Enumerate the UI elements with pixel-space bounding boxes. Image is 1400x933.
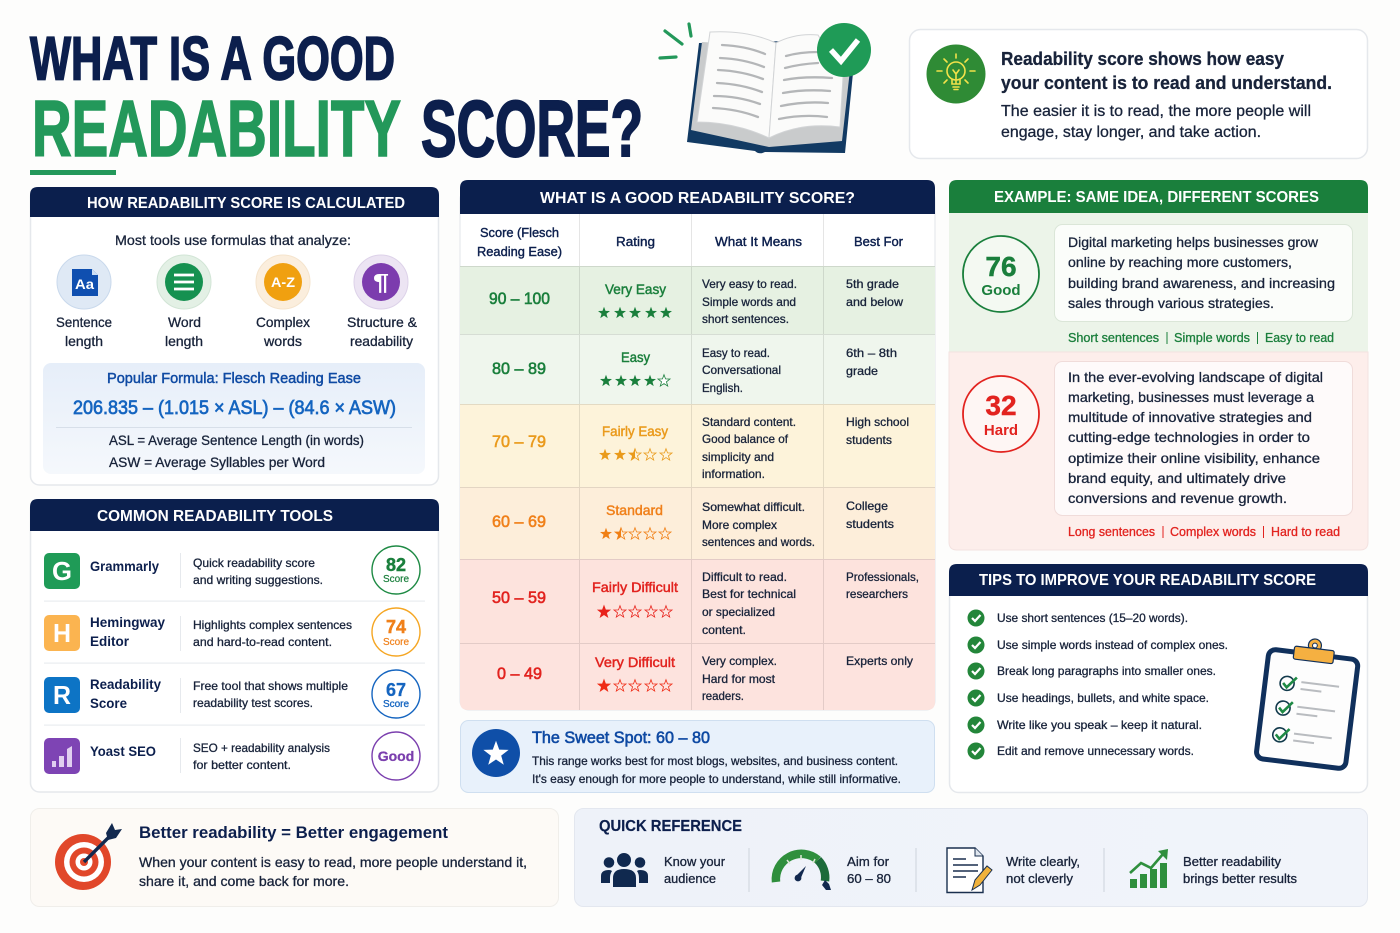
callout: better engagement: Better readability = Better engagement <box>139 823 448 842</box>
callout: better engagement: share it, and come back for more. <box>139 873 349 889</box>
checklist: Break long paragraphs into smaller ones. <box>997 664 1216 678</box>
panel: tips <box>949 564 1368 792</box>
panel: how readability score is calculated <box>30 187 439 485</box>
row: 60-69 <box>460 487 935 559</box>
tool: readability score: Readability <box>90 676 161 692</box>
row: 70-79: Standard content. <box>702 415 796 429</box>
tool: yoast seo: Good <box>378 748 414 764</box>
text block: hard example: marketing, businesses must leverage a <box>1068 389 1314 405</box>
row: 80-89 <box>460 334 935 404</box>
heading: tips <box>949 564 1368 596</box>
row: 0-49: 0 – 49 <box>497 664 542 683</box>
label: structure and readability: Structure & <box>347 314 418 330</box>
item: write clearly: Write clearly, <box>1006 855 1080 869</box>
row: 90-100: Very Easy <box>605 281 666 297</box>
tool: readability score: Score <box>90 695 127 711</box>
title: READABILITY <box>32 84 401 173</box>
row: 60-69: Standard <box>606 502 663 518</box>
text block: good example: sales through various strategies. <box>1068 295 1274 311</box>
row: 50-59: researchers <box>846 587 908 601</box>
tool: yoast seo: SEO + readability analysis <box>193 741 330 755</box>
label: sentence length: Sentence <box>56 314 112 330</box>
label: complex words <box>256 314 310 349</box>
tool: readability score: Free tool that shows multiple <box>193 679 348 693</box>
label: word length: Word <box>168 314 201 330</box>
panel: example scores <box>949 180 1368 550</box>
row: 90-100: 5th grade <box>846 277 899 291</box>
tags: hard example: Long sentences <box>1068 525 1155 539</box>
row: 70-79: information. <box>702 467 765 481</box>
tool: grammarly <box>44 546 420 594</box>
text block: good example: online by reaching more customers, <box>1068 254 1292 270</box>
callout: sweet spot: The Sweet Spot: 60 – 80 <box>532 729 710 747</box>
tags: good example: Short sentences <box>1068 331 1159 345</box>
row: 0-49: Experts only <box>846 654 913 668</box>
row: 50-59: Professionals, <box>846 570 919 584</box>
tags: hard example: Hard to read <box>1271 525 1340 539</box>
tool: hemingway editor: H <box>53 618 71 648</box>
tool: yoast seo: for better content. <box>193 758 291 772</box>
score badge: 32 hard: 32 <box>985 390 1017 421</box>
label: complex words: words <box>263 333 302 349</box>
checklist: Use short sentences (15–20 words). <box>997 611 1188 625</box>
label: complex words: Complex <box>256 314 310 330</box>
row: 90-100: Simple words and <box>702 295 796 309</box>
callout: better engagement <box>30 808 558 906</box>
tool: readability score: R <box>53 680 71 710</box>
row: 90-100: 90 – 100 <box>489 289 550 308</box>
score badge: 76 good <box>963 236 1039 312</box>
icon: structure: ¶ <box>373 269 389 295</box>
row: 90-100: short sentences. <box>702 312 789 326</box>
label: word length <box>165 314 203 349</box>
tool: grammarly: Grammarly <box>90 558 159 574</box>
text block: hard example <box>1054 362 1352 516</box>
icon: complex words <box>256 255 310 309</box>
tool: grammarly: 82 <box>386 555 406 575</box>
panel: definition: The easier it is to read, the more people will <box>1001 103 1311 120</box>
text block: hard example: optimize their online visibility, enhance <box>1068 450 1320 466</box>
panel: definition: engage, stay longer, and take action. <box>1001 124 1261 141</box>
row: 70-79: simplicity and <box>702 450 774 464</box>
row: 80-89: Conversational <box>702 363 781 377</box>
row: 80-89: Easy to read. <box>702 346 770 360</box>
icon: sentence length: Aa <box>75 276 94 292</box>
callout: sweet spot: It's easy enough for more people to understand, while still informative. <box>532 772 901 786</box>
callout: sweet spot: This range works best for most blogs, websites, and business content. <box>532 754 898 768</box>
row: 50-59: Fairly Difficult <box>592 579 678 595</box>
heading: quick reference: QUICK REFERENCE <box>599 818 742 835</box>
heading: example <box>949 180 1368 213</box>
row: 50-59: Best for technical <box>702 587 796 601</box>
score badge: 76 good: Good <box>981 282 1021 299</box>
row: 60-69: College <box>846 499 888 513</box>
tool: hemingway editor: Editor <box>90 633 130 649</box>
row: 80-89: English. <box>702 381 743 395</box>
score badge: 76 good: 76 <box>985 251 1017 282</box>
label: structure and readability <box>347 314 418 349</box>
text block: hard example: conversions and revenue growth. <box>1068 490 1287 506</box>
label: word length: length <box>165 333 203 349</box>
panel: definition <box>910 30 1368 158</box>
score badge: 32 hard: Hard <box>984 422 1018 439</box>
item: better results <box>1130 849 1297 888</box>
panel: common readability tools <box>30 499 439 792</box>
row: 90-100 <box>460 266 935 334</box>
row: 90-100: Very easy to read. <box>702 277 797 291</box>
row: 0-49: readers. <box>702 689 744 703</box>
icon: lightbulb <box>926 44 986 104</box>
callout: better engagement: When your content is easy to read, more people understand it, <box>139 854 527 870</box>
tool: yoast seo <box>44 732 420 780</box>
checklist <box>968 610 1228 760</box>
text block: hard example: In the ever-evolving landscape of digital <box>1068 369 1323 385</box>
item: better results: brings better results <box>1183 872 1297 886</box>
title: SCORE? <box>421 84 643 173</box>
item: know your audience: audience <box>664 872 716 886</box>
row: 70-79: High school <box>846 415 909 429</box>
row: 50-59 <box>460 559 935 643</box>
panel: score table <box>460 180 935 710</box>
checklist: Write like you speak – keep it natural. <box>997 718 1202 732</box>
score badge: 32 hard <box>963 376 1039 452</box>
panel: definition: your content is to read and understand. <box>1001 73 1332 93</box>
row: 70-79: Fairly Easy <box>602 423 668 439</box>
item: aim for 60-80: Aim for <box>847 855 889 869</box>
row: 90-100: and below <box>846 295 903 309</box>
row: 80-89: grade <box>846 364 878 378</box>
row: 0-49: Hard for most <box>702 672 776 686</box>
heading: tools: COMMON READABILITY TOOLS <box>97 508 333 525</box>
icon: complex words: A-Z <box>271 275 295 290</box>
table column headers <box>477 225 904 259</box>
formula box: 206.835 – (1.015 × ASL) – (84.6 × ASW) <box>73 398 396 419</box>
label: sentence length <box>56 314 112 349</box>
text block: hard example: cutting-edge technologies in order to <box>1068 429 1310 445</box>
table column headers: Score (Flesch <box>480 225 559 240</box>
row: 50-59: or specialized <box>702 605 775 619</box>
text block: hard example: brand equity, and ultimately drive <box>1068 470 1286 486</box>
tool: readability score: readability test scores. <box>193 696 313 710</box>
table column headers: Reading Ease) <box>477 244 562 259</box>
text: intro: Most tools use formulas that analyze: <box>115 232 351 248</box>
item: write clearly: not cleverly <box>1006 872 1074 886</box>
heading: calculation <box>30 187 439 217</box>
item: write clearly <box>947 848 1080 892</box>
table column headers: Best For <box>854 234 904 249</box>
panel: definition: Readability score shows how easy <box>1001 49 1284 69</box>
row: 60-69: sentences and words. <box>702 535 815 549</box>
panel: quick reference <box>574 808 1368 906</box>
row: 80-89: Easy <box>621 349 650 365</box>
row: 80-89: 6th – 8th <box>846 346 897 360</box>
item: know your audience: Know your <box>664 855 725 869</box>
tags: good example: Simple words <box>1174 331 1250 345</box>
tool: readability score: 67 <box>386 680 406 700</box>
heading: example: EXAMPLE: SAME IDEA, DIFFERENT SCORES <box>994 189 1319 206</box>
callout: sweet spot <box>460 720 934 792</box>
formula box <box>43 363 425 474</box>
row: 60-69: More complex <box>702 518 777 532</box>
table column headers: What It Means <box>715 234 803 249</box>
checklist: Edit and remove unnecessary words. <box>997 744 1194 758</box>
row: 50-59: content. <box>702 623 746 637</box>
row: 70-79: 70 – 79 <box>492 432 546 451</box>
tool: hemingway editor: Hemingway <box>90 614 165 630</box>
text block: good example: Digital marketing helps businesses grow <box>1068 234 1319 250</box>
tags: hard example <box>1068 525 1340 539</box>
icon: word length <box>157 255 211 309</box>
row: 80-89: 80 – 89 <box>492 359 546 378</box>
icon: target with arrow <box>55 823 122 890</box>
row: 70-79: students <box>846 433 892 447</box>
item: know your audience <box>601 853 725 887</box>
tool: hemingway editor: and hard-to-read content. <box>193 635 332 649</box>
checklist: Use simple words instead of complex ones. <box>997 638 1228 652</box>
row: 60-69: 60 – 69 <box>492 512 546 531</box>
title <box>30 24 643 175</box>
icon: open book with check <box>660 23 871 153</box>
tool: hemingway editor: Highlights complex sentences <box>193 618 352 632</box>
table column headers: Rating <box>616 234 655 249</box>
icon: clipboard <box>1256 634 1360 769</box>
row: 0-49 <box>460 643 935 710</box>
tool: readability score <box>44 670 420 718</box>
item: aim for 60-80: 60 – 80 <box>847 872 891 886</box>
heading: tools <box>30 499 439 531</box>
heading: calculation: HOW READABILITY SCORE IS CALCULATED <box>87 195 405 212</box>
heading: tips: TIPS TO IMPROVE YOUR READABILITY SCORE <box>979 572 1316 589</box>
row: 60-69: Somewhat difficult. <box>702 500 805 514</box>
formula box: ASL = Average Sentence Length (in words) <box>109 432 364 448</box>
tool: hemingway editor: 74 <box>386 617 406 637</box>
label: structure and readability: readability <box>350 333 413 349</box>
row: 60-69: students <box>846 517 894 531</box>
title: WHAT IS A GOOD <box>30 24 395 92</box>
text block: good example: building brand awareness, and increasing <box>1068 275 1335 291</box>
item: aim for 60-80 <box>776 854 891 890</box>
row: 50-59: 50 – 59 <box>492 588 546 607</box>
row: 0-49: Very complex. <box>702 654 777 668</box>
row: 70-79: Good balance of <box>702 432 789 446</box>
checklist: Use headings, bullets, and white space. <box>997 691 1209 705</box>
label: sentence length: length <box>65 333 103 349</box>
heading: score table <box>460 180 935 214</box>
formula box: ASW = Average Syllables per Word <box>109 454 325 470</box>
row: 50-59: Difficult to read. <box>702 570 787 584</box>
text block: hard example: multitude of innovative strategies and <box>1068 409 1312 425</box>
tool: hemingway editor: Score <box>383 637 409 648</box>
tool: readability score: Score <box>383 699 409 710</box>
tool: yoast seo: Yoast SEO <box>90 743 156 759</box>
formula box: Popular Formula: Flesch Reading Ease <box>107 371 361 387</box>
tool: grammarly: Score <box>383 574 409 585</box>
icon: structure <box>354 255 408 309</box>
tags: hard example: Complex words <box>1170 525 1256 539</box>
tool: hemingway editor <box>44 608 420 656</box>
icon: star badge <box>472 729 520 777</box>
tags: good example: Easy to read <box>1265 331 1334 345</box>
tool: grammarly: and writing suggestions. <box>193 573 323 587</box>
tags: good example <box>1068 331 1334 345</box>
text block: good example <box>1054 224 1352 322</box>
tool: grammarly: G <box>52 556 72 586</box>
heading: score table: WHAT IS A GOOD READABILITY SCORE? <box>540 190 855 207</box>
row: 70-79 <box>460 404 935 487</box>
tool: grammarly: Quick readability score <box>193 556 315 570</box>
icon: sentence length <box>57 255 111 309</box>
row: 0-49: Very Difficult <box>595 654 675 670</box>
item: better results: Better readability <box>1183 855 1282 869</box>
